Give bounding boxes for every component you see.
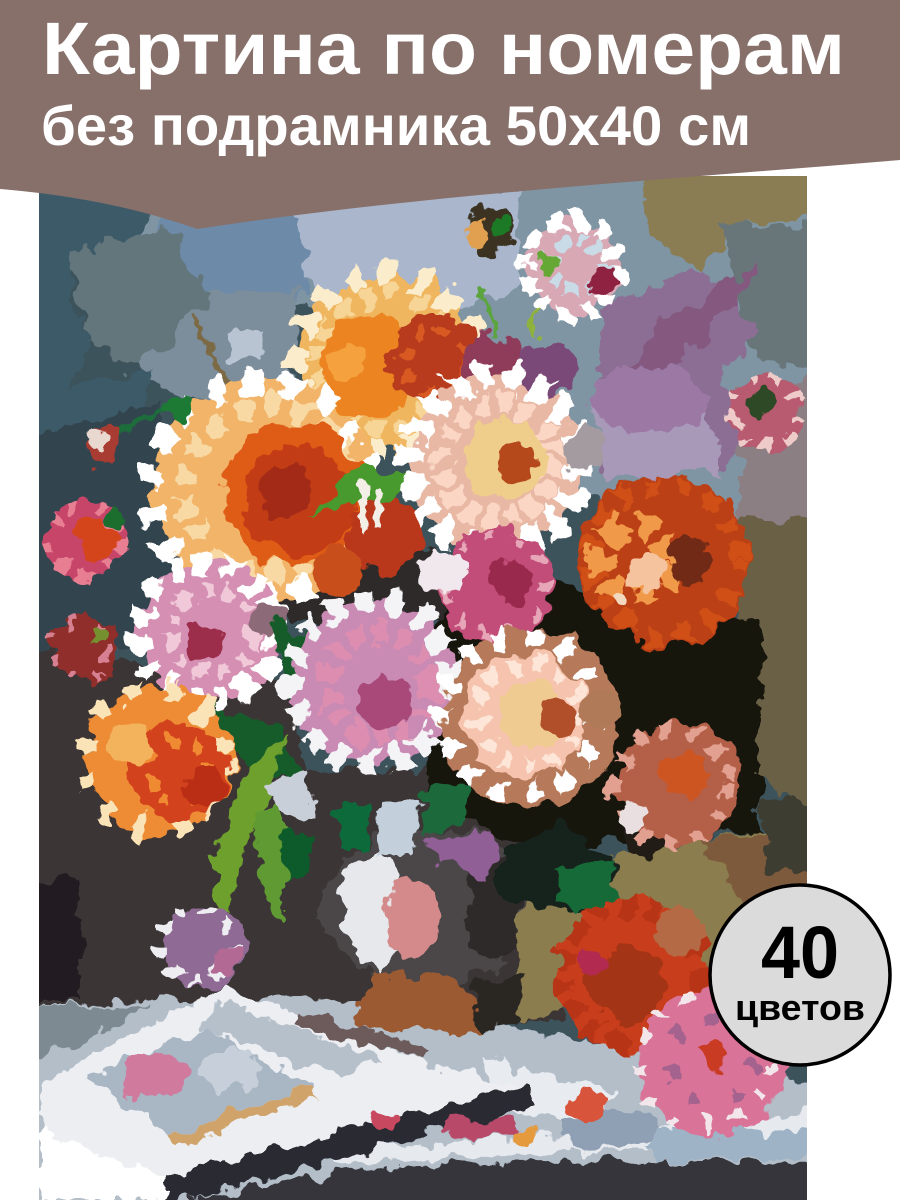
title: Картина по номерам — [42, 7, 845, 90]
flower: right top small pink — [727, 374, 803, 450]
flower: lilac dahlia near book — [159, 906, 247, 990]
painting: dahlia bouquet — [20, 160, 830, 1200]
flower: top orange dahlia — [297, 274, 575, 450]
flower: left small red dahlia — [45, 500, 125, 580]
flower: left pink dahlia — [138, 560, 286, 704]
table surface — [20, 995, 830, 1200]
flower: lower right pink dahlia — [638, 988, 786, 1136]
badge: 40 colours — [710, 885, 890, 1065]
flower: lower-left orange dahlia — [82, 686, 234, 834]
stems and sprigs — [118, 286, 542, 436]
flower: bud left — [86, 395, 197, 464]
leaves and lilac petals above vase — [375, 785, 620, 920]
badge: 40 colours: 40 — [761, 911, 839, 994]
painting background — [39, 176, 807, 1084]
open book — [40, 985, 535, 1200]
flower: middle pink dahlia — [292, 600, 457, 764]
leaves: green centre-left — [190, 620, 370, 920]
flower: right red dahlia — [579, 474, 751, 646]
flower: large peach dahlia — [440, 628, 620, 808]
flower: lower right red dahlia — [556, 899, 708, 1051]
flower: top bud — [464, 206, 516, 254]
subtitle: без подрамника 50х40 см — [41, 94, 751, 157]
flower: left dark red dahlia — [50, 616, 119, 684]
flower: lower right brown-pink dahlia — [616, 720, 742, 844]
badge: 40 colours: цветов — [735, 987, 865, 1028]
flower: magenta dahlia behind centre — [416, 527, 553, 643]
scattered petals on table — [369, 1092, 612, 1144]
vase — [320, 830, 528, 1030]
flower: top pink dahlia — [526, 222, 621, 314]
flower: central white-peach dahlia — [407, 374, 607, 550]
flower: left orange dahlia — [150, 378, 423, 602]
purple sprig top right — [590, 262, 760, 434]
header banner — [0, 0, 900, 229]
leaf: green over orange dahlia — [310, 465, 412, 525]
